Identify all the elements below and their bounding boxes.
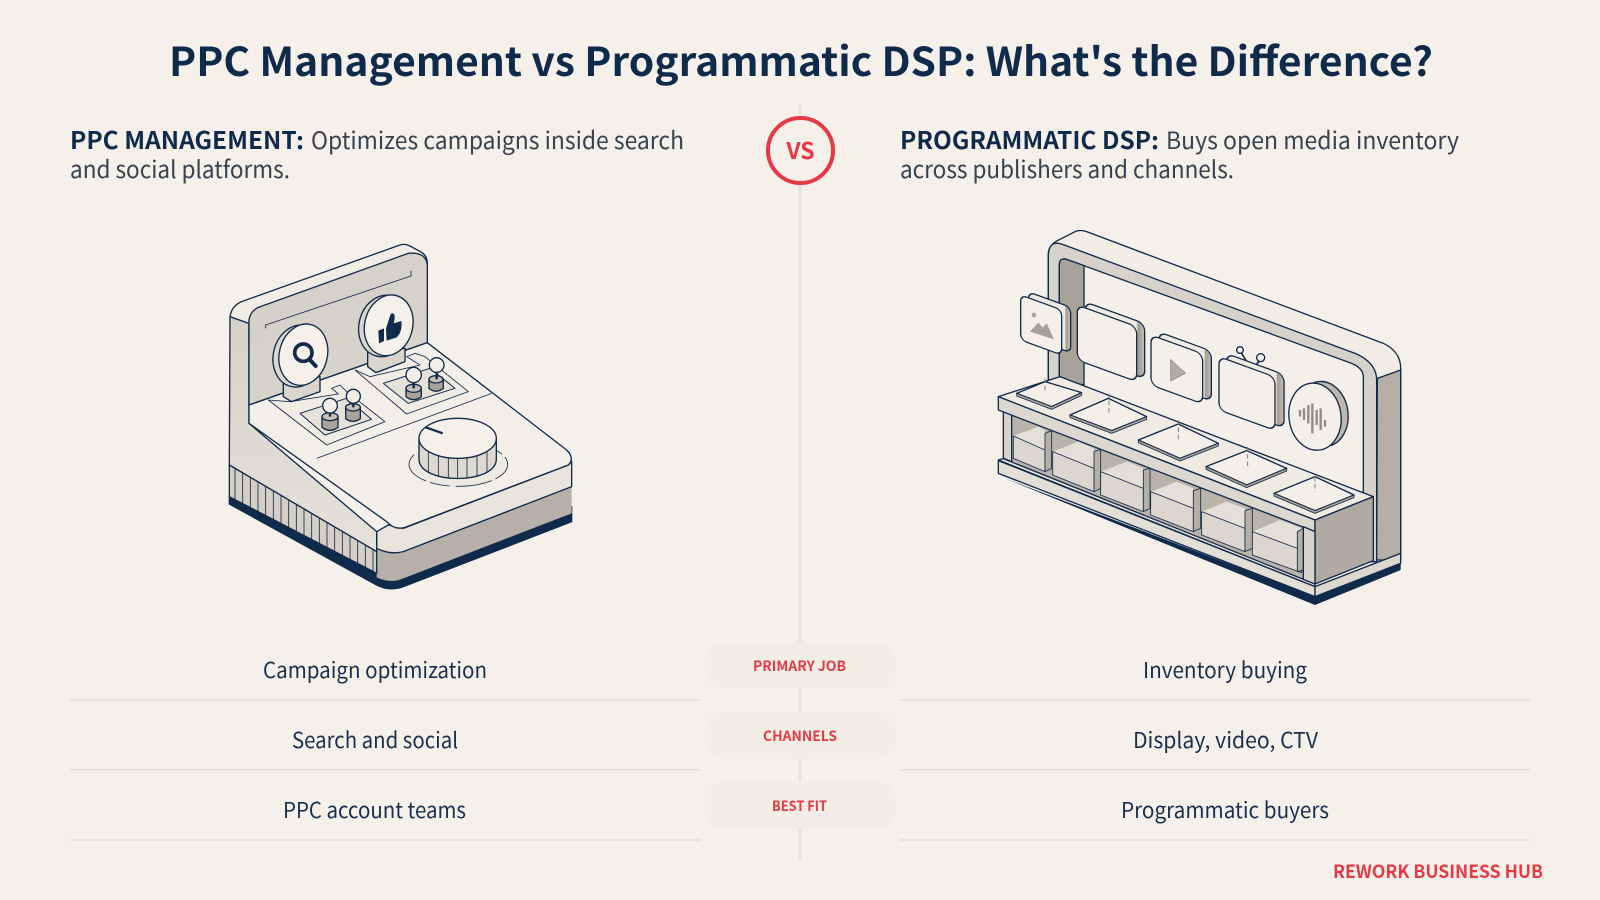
icon: search disc (266, 319, 334, 402)
icon card: image (1021, 292, 1071, 355)
pill: channels (705, 712, 896, 759)
pill: primary job: PRIMARY JOB (753, 656, 846, 676)
right column intro text: across publishers and channels. (900, 150, 1234, 185)
comparison rows: PPC management: Search and social (292, 723, 458, 755)
comparison rows: PPC management (70, 653, 701, 841)
pill: best fit: BEST FIT (772, 796, 827, 816)
illustration: programmatic DSP media rack (998, 230, 1401, 605)
illustration: PPC control console (229, 244, 572, 589)
left column intro text: PPC MANAGEMENT: (70, 121, 304, 156)
left column intro text: and social platforms. (70, 150, 290, 185)
VS badge: VS (785, 132, 815, 166)
right control plate (355, 353, 468, 414)
pill: channels: CHANNELS (763, 726, 837, 746)
right column intro text: Buys open media inventory (1166, 121, 1459, 156)
center label pills (705, 642, 896, 829)
left column intro text (70, 121, 684, 185)
left control plate (268, 385, 385, 445)
media card: banner (1077, 302, 1145, 382)
right column intro text: PROGRAMMATIC DSP: (900, 121, 1159, 156)
comparison rows: PPC management: PPC account teams (283, 793, 466, 825)
shelf unit (998, 377, 1401, 605)
media card: connected TV (1219, 347, 1284, 430)
dial knob (409, 418, 508, 486)
footer brand: REWORK BUSINESS HUB (1333, 858, 1543, 884)
VS badge (768, 118, 833, 183)
icon: thumbs up disc (352, 290, 419, 373)
pill: best fit (705, 782, 896, 829)
title: PPC Management vs Programmatic DSP: What's the Difference? (169, 30, 1433, 88)
right column intro text (900, 121, 1459, 185)
comparison rows: programmatic DSP: Display, video, CTV (1133, 723, 1318, 755)
media card: audio disc (1285, 378, 1352, 454)
comparison rows: programmatic DSP: Inventory buying (1143, 653, 1308, 685)
pill: primary job (705, 642, 896, 689)
comparison rows: programmatic DSP: Programmatic buyers (1121, 793, 1329, 825)
comparison rows: programmatic DSP (900, 653, 1530, 841)
joysticks (322, 358, 444, 430)
storage boxes (1013, 427, 1303, 573)
left column intro text: Optimizes campaigns inside search (311, 121, 684, 156)
placement pads (1017, 378, 1354, 513)
media card: video play (1151, 332, 1211, 404)
comparison rows: PPC management: Campaign optimization (263, 653, 487, 685)
